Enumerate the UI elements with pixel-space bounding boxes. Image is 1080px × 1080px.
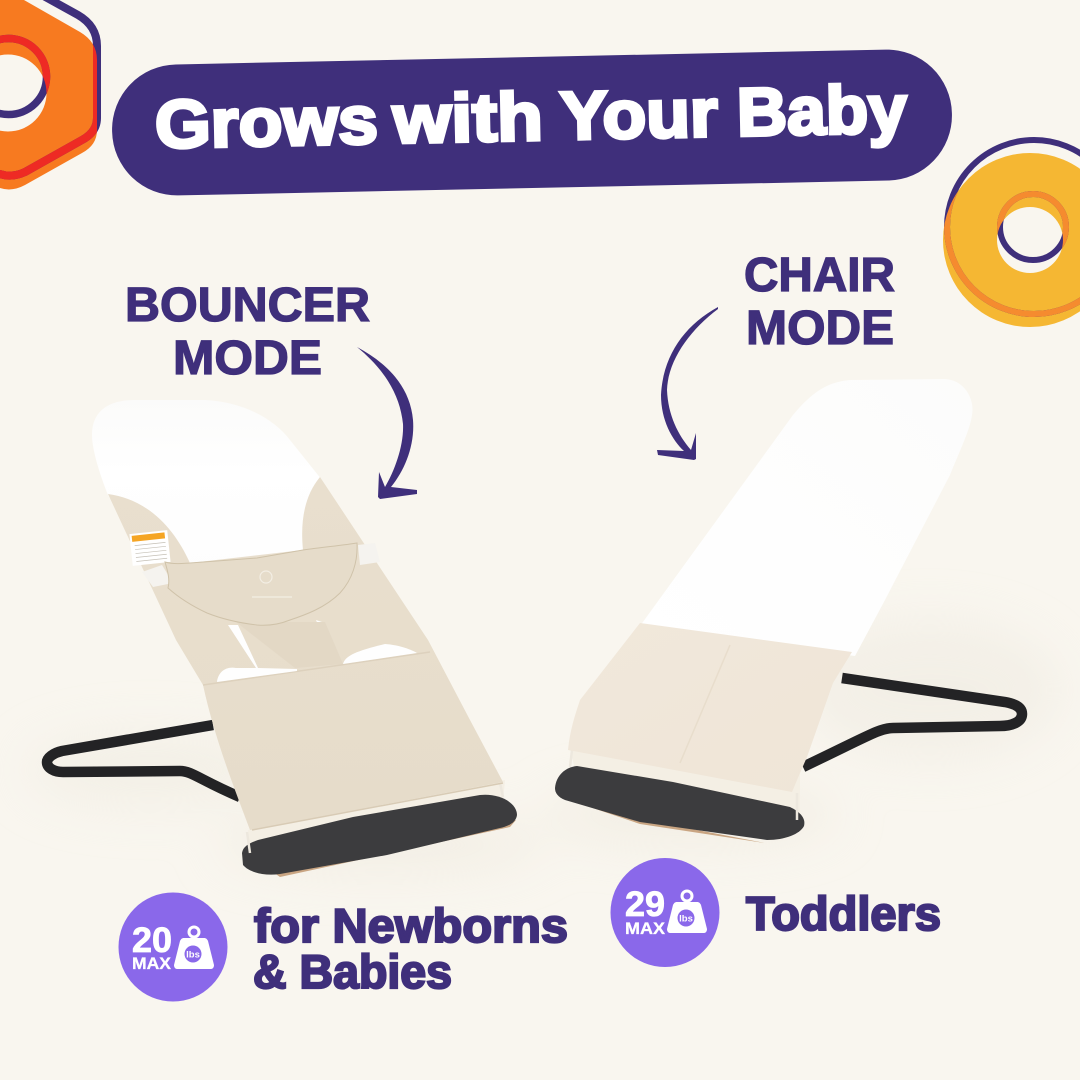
caption: toddlers: Toddlers: [746, 887, 941, 940]
icon: yellow donut: [943, 140, 1080, 327]
badge: 29 lbs max: 29: [625, 885, 665, 924]
title banner: with: [391, 79, 544, 158]
frame: right tube: [803, 678, 1022, 767]
base: left: [242, 780, 517, 877]
heading: bouncer mode: BOUNCER: [125, 279, 370, 332]
heading: bouncer mode: MODE: [173, 332, 322, 385]
bouncer seat in chair mode: [555, 379, 1022, 843]
bouncer seat in bouncer mode: [47, 400, 517, 877]
arrow: chair mode: [657, 307, 718, 460]
heading: chair mode: CHAIR: [744, 249, 895, 302]
mesh: leg openings: [217, 620, 417, 682]
caption: for newborns and babies: [253, 899, 568, 998]
badge: 20 lbs max: 20: [132, 921, 172, 960]
caption: for newborns and babies: for Newborns: [254, 899, 568, 952]
harness pad: [165, 543, 357, 625]
fabric: centre seam: [680, 645, 730, 763]
title banner: Your: [559, 75, 719, 154]
title banner: [111, 48, 953, 197]
mesh: head section: [92, 400, 322, 580]
floor shadows: [25, 620, 1060, 875]
heading: chair mode: MODE: [746, 302, 894, 355]
fabric: lower panel seam: [203, 652, 430, 685]
straps: [142, 543, 380, 587]
badge: 29 lbs max: [610, 858, 720, 967]
fabric: centre crotch panel: [236, 622, 343, 668]
arrow: bouncer mode: [357, 347, 417, 499]
badge: 20 lbs max: MAX: [132, 955, 171, 973]
logo on pad: [252, 571, 292, 597]
caption: for newborns and babies: & Babies: [253, 945, 452, 998]
icon: weight: lbs: [679, 914, 693, 924]
title banner: Grows: [154, 82, 379, 163]
badge: 29 lbs max: MAX: [625, 920, 665, 938]
heading: bouncer mode: [125, 279, 370, 385]
icon: weight: lbs: [186, 950, 200, 960]
mesh: head section: [640, 379, 973, 656]
icon: orange hexagon nut: [0, 0, 97, 189]
title banner: Baby: [736, 71, 908, 151]
frame: left tube: [47, 725, 240, 797]
badge: 20 lbs max: [118, 892, 228, 1002]
heading: chair mode: [744, 249, 895, 355]
base: right: [555, 748, 804, 843]
fabric: seat body: [108, 477, 503, 830]
warning label: [129, 530, 171, 566]
fabric: seat body: [568, 623, 852, 792]
